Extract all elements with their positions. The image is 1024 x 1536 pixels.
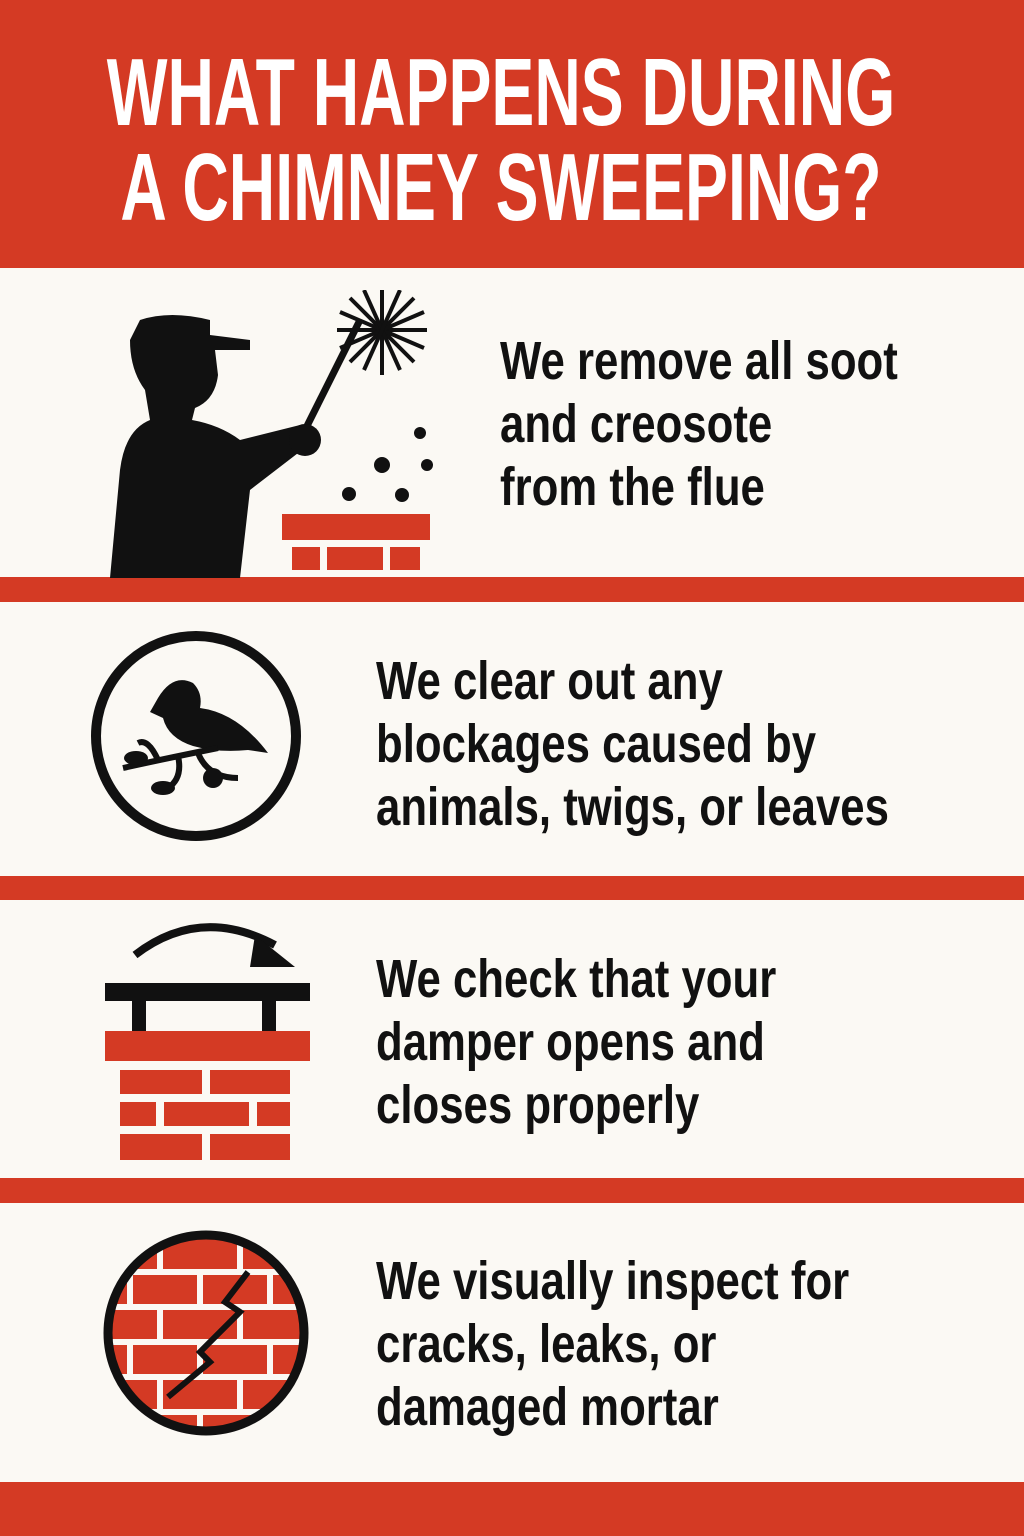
icon: chimney sweep — [110, 290, 433, 578]
title: A CHIMNEY SWEEPING? — [120, 134, 882, 241]
text 2: animals, twigs, or leaves — [376, 777, 889, 837]
header banner — [0, 0, 1024, 268]
text 1: We remove all soot — [500, 331, 898, 391]
text 2 — [376, 651, 889, 837]
text 4: We visually inspect for — [376, 1251, 849, 1311]
text 4 — [376, 1251, 849, 1437]
title — [106, 39, 895, 241]
title: WHAT HAPPENS DURING — [107, 39, 895, 146]
text 3: damper opens and — [376, 1012, 765, 1072]
text 2: blockages caused by — [376, 714, 816, 774]
text 1: and creosote — [500, 394, 772, 454]
text 4: cracks, leaks, or — [376, 1314, 716, 1374]
text 3: We check that your — [376, 949, 776, 1009]
icon: bird in circle — [91, 631, 301, 841]
text 1: from the flue — [500, 457, 765, 517]
text 1 — [500, 331, 898, 517]
text 2: We clear out any — [376, 651, 723, 711]
text 3 — [376, 949, 776, 1135]
icon: damper chimney — [105, 923, 310, 1160]
icon: cracked brick circle — [104, 1230, 308, 1436]
text 4: damaged mortar — [376, 1377, 719, 1437]
text 3: closes properly — [376, 1075, 699, 1135]
